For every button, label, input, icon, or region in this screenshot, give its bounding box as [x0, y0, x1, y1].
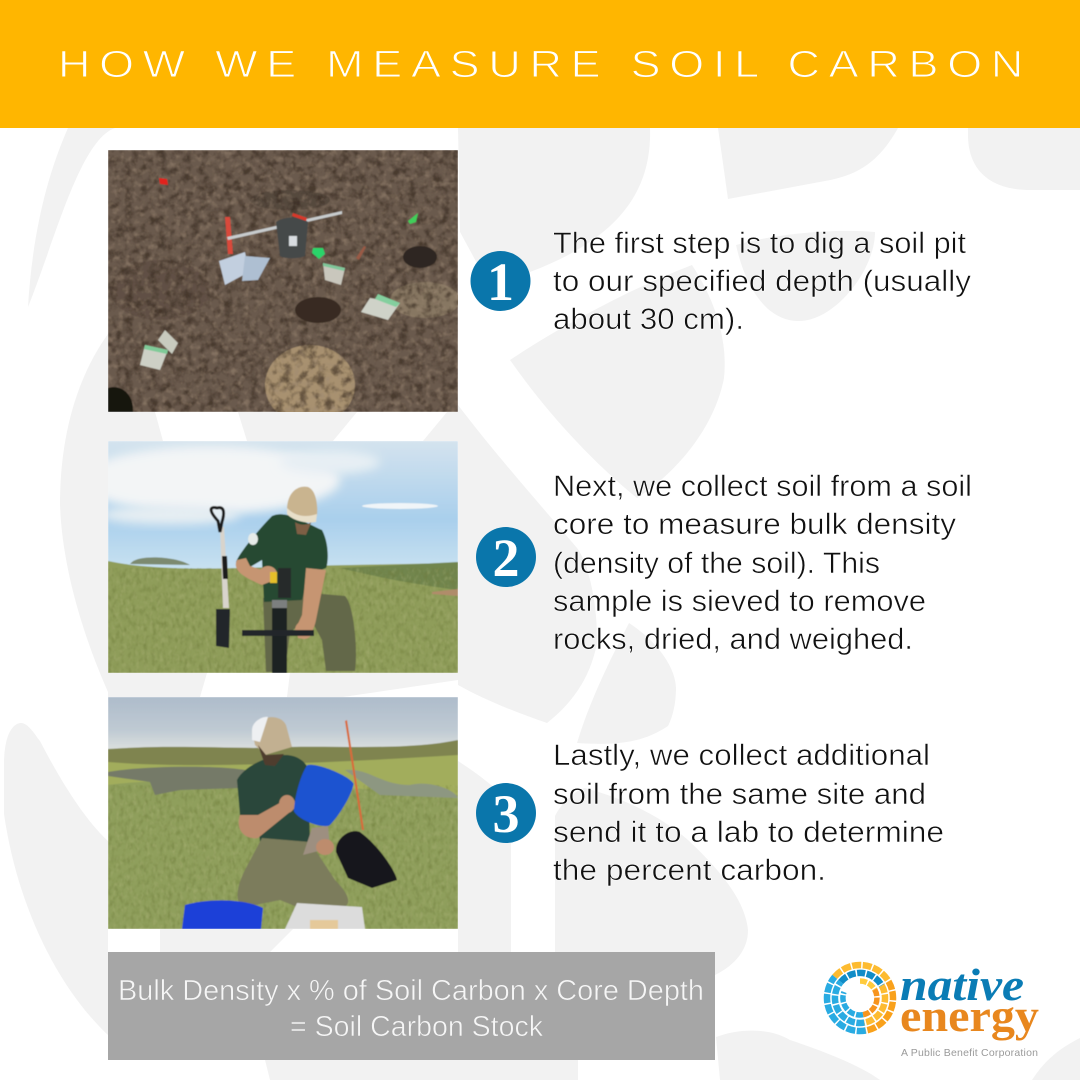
icon: logo sun ring: [827, 965, 893, 1031]
logo: native energy: native: [900, 959, 1024, 1010]
title: HOW WE MEASURE SOIL CARBON: [58, 42, 1023, 85]
step 3 text: the percent carbon.: [553, 854, 826, 887]
step 2 text: sample is sieved to remove: [553, 585, 926, 618]
formula box: [108, 952, 715, 1060]
step 1 text: [553, 227, 971, 336]
step 3 number badge: [476, 783, 536, 844]
step 1 number badge: [470, 251, 530, 312]
step 1 text: The first step is to dig a soil pit: [553, 227, 966, 260]
step 2 number badge: [476, 527, 536, 588]
formula box: = Soil Carbon Stock: [290, 1011, 543, 1043]
step 3 text: [553, 739, 944, 887]
step 2 text: (density of the soil). This: [553, 547, 880, 580]
step 1 text: about 30 cm).: [553, 303, 744, 336]
step 3 text: send it to a lab to determine: [553, 816, 944, 849]
step 2 text: Next, we collect soil from a soil: [553, 470, 972, 503]
step 2 text: [553, 470, 972, 656]
logo: native energy: energy: [900, 990, 1039, 1041]
formula box: Bulk Density x % of Soil Carbon x Core Depth: [118, 975, 704, 1007]
step 3 text: soil from the same site and: [553, 778, 926, 811]
photo 3: worker pouring soil from blue bucket: [108, 697, 458, 929]
step 1 number badge: 1: [487, 252, 514, 312]
header band: [0, 0, 1080, 128]
step 1 text: to our specified depth (usually: [553, 265, 971, 298]
logo: native energy: [827, 959, 1039, 1059]
step 2 text: rocks, dried, and weighed.: [553, 623, 913, 656]
step 3 text: Lastly, we collect additional: [553, 739, 930, 772]
step 3 number badge: 3: [492, 784, 520, 844]
step 2 text: core to measure bulk density: [553, 508, 956, 541]
photo 1: soil pit with sample bags: [108, 150, 458, 412]
photo 2: worker driving soil core sampler: [108, 441, 458, 673]
step 2 number badge: 2: [492, 528, 520, 588]
logo: native energy: A Public Benefit Corporation: [901, 1047, 1038, 1059]
